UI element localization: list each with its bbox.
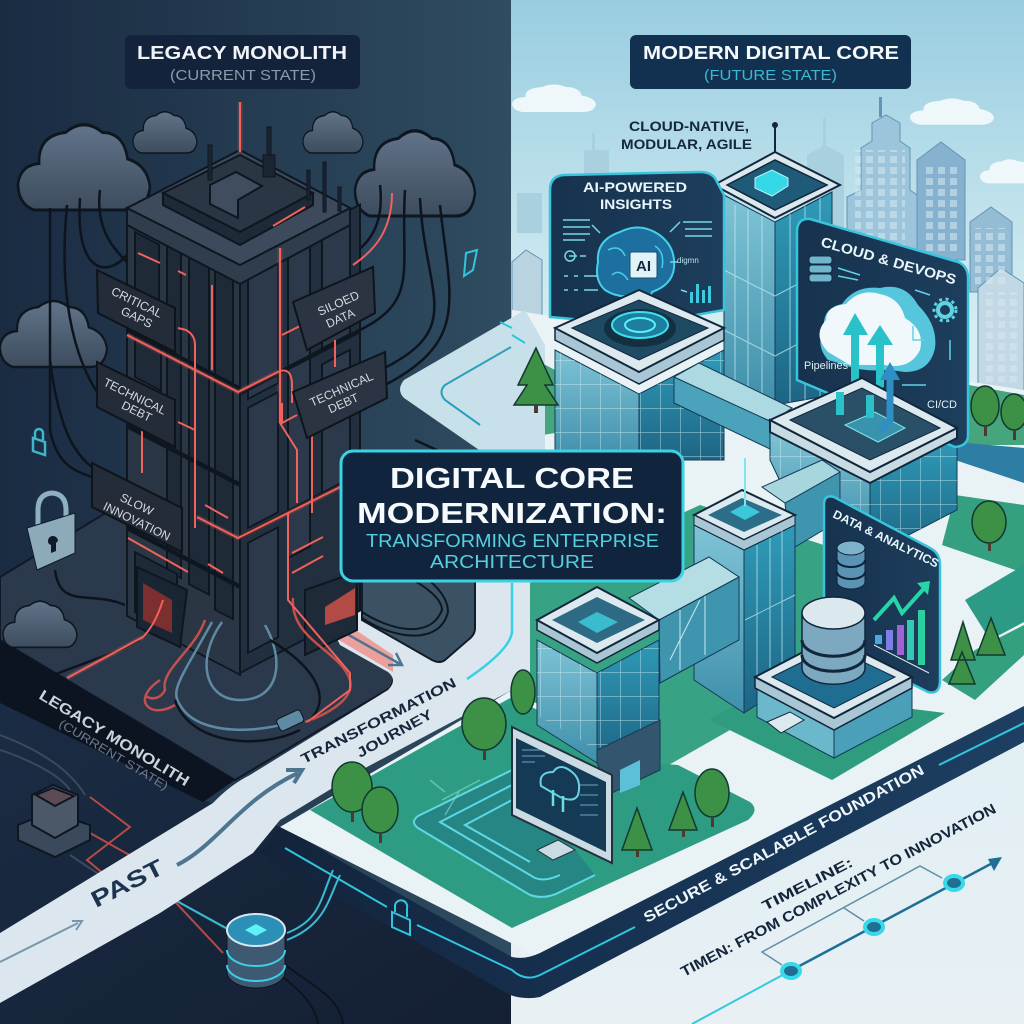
icon: server node bbox=[18, 785, 90, 857]
icon: cloud bbox=[819, 287, 935, 372]
callout: technical debt right: TECHNICAL bbox=[307, 369, 376, 410]
timeline text: TIMELINE: bbox=[759, 854, 855, 914]
icon: small teal shape bbox=[464, 250, 477, 276]
background: modern side bbox=[511, 0, 1024, 1024]
dark clouds bbox=[0, 112, 475, 647]
red circuit lines bbox=[67, 102, 392, 722]
panel: ai-powered insights: INSIGHTS bbox=[600, 196, 672, 212]
icon: database cylinder bbox=[802, 597, 865, 684]
road pad with cables bbox=[362, 581, 475, 662]
cloud devops building bbox=[770, 432, 957, 555]
secure foundation label: SECURE & SCALABLE FOUNDATION bbox=[641, 762, 927, 927]
subheading: cloud native bbox=[621, 118, 752, 152]
ai building bbox=[555, 328, 724, 460]
callout: siloed data: DATA bbox=[324, 306, 357, 331]
white clouds and distant skyline bbox=[512, 84, 1024, 393]
central title panel: TRANSFORMING ENTERPRISE bbox=[366, 531, 659, 551]
title: legacy heading: (CURRENT STATE) bbox=[170, 67, 316, 84]
front office building bbox=[537, 587, 660, 793]
central title panel: DIGITAL CORE bbox=[390, 463, 634, 495]
road label: transformation journey bbox=[298, 674, 459, 767]
central title panel: ARCHITECTURE bbox=[430, 552, 594, 572]
icon: ai brain bbox=[597, 227, 674, 305]
road label: transformation journey: JOURNEY bbox=[354, 706, 436, 761]
callout: technical debt left: TECHNICAL bbox=[101, 375, 169, 418]
platform rim bbox=[260, 706, 1024, 998]
title: modern heading bbox=[630, 35, 911, 89]
trees bbox=[332, 348, 1024, 850]
transformation road bbox=[0, 310, 545, 1003]
doors bbox=[137, 567, 357, 655]
arrows landing on roof bbox=[840, 385, 890, 432]
title: legacy heading bbox=[125, 35, 360, 89]
arrows up into cloud bbox=[840, 313, 900, 432]
callout: siloed data: SILOED bbox=[315, 288, 362, 319]
chart: rising bars and arrow bbox=[874, 581, 930, 673]
bottom legacy elements bbox=[18, 785, 410, 988]
icon: small teal lock bbox=[33, 429, 45, 455]
ai algorithm label: digmn bbox=[677, 256, 699, 265]
ci/cd label: CI/CD bbox=[927, 399, 957, 411]
ai building roof bbox=[555, 290, 724, 372]
title: legacy heading: LEGACY MONOLITH bbox=[137, 43, 347, 63]
title: modern heading: MODERN DIGITAL CORE bbox=[643, 43, 899, 63]
arrow: from door bbox=[340, 630, 402, 665]
tall back tower bbox=[714, 122, 840, 405]
callouts on tower bbox=[92, 267, 387, 552]
title: modern heading: (FUTURE STATE) bbox=[704, 67, 837, 84]
callout: technical debt right: DEBT bbox=[326, 390, 361, 416]
middle connector tower bbox=[694, 458, 795, 713]
ai mini chart bbox=[690, 284, 711, 303]
tower roof bbox=[127, 208, 350, 284]
callout: slow innovation: INNOVATION bbox=[101, 499, 173, 544]
background: legacy side bbox=[0, 0, 511, 1024]
ground under legacy platform bbox=[0, 700, 511, 1024]
callout: technical debt right bbox=[293, 352, 387, 438]
icon: rim lock bbox=[392, 900, 410, 935]
panel: ai-powered insights: AI-POWERED bbox=[583, 179, 687, 195]
roof units bbox=[163, 155, 313, 245]
antennas bbox=[208, 127, 341, 212]
legacy floor label: LEGACY MONOLITH bbox=[36, 687, 192, 790]
icon: database node bbox=[227, 914, 285, 988]
callout: critical gaps: CRITICAL bbox=[109, 284, 165, 321]
skybridge lower left bbox=[629, 557, 739, 683]
subheading: cloud native: CLOUD-NATIVE, bbox=[629, 118, 749, 134]
ai side icons bbox=[563, 220, 712, 292]
callout: slow innovation bbox=[92, 463, 182, 552]
left platform bbox=[0, 480, 394, 802]
platform cables bbox=[40, 598, 351, 741]
subheading: cloud native: MODULAR, AGILE bbox=[621, 136, 752, 152]
callout: technical debt left: DEBT bbox=[119, 398, 155, 425]
callout: critical gaps bbox=[97, 270, 175, 352]
panel: cloud and devops bbox=[797, 219, 968, 447]
callout: siloed data bbox=[293, 267, 375, 350]
skybridge lower right bbox=[762, 460, 840, 550]
legacy floor label: (CURRENT STATE) bbox=[56, 717, 171, 793]
cable connector bbox=[276, 709, 305, 732]
panel: cloud and devops: CLOUD & DEVOPS bbox=[819, 234, 958, 287]
callout: critical gaps: GAPS bbox=[119, 304, 155, 331]
icon: ai brain: AI bbox=[636, 258, 651, 275]
data building bbox=[755, 597, 912, 758]
small data traces bbox=[430, 780, 480, 815]
arrow: road journey bbox=[177, 770, 302, 865]
tree trunks bbox=[351, 405, 1016, 857]
arrow: road start bbox=[0, 921, 82, 962]
callout: slow innovation: SLOW bbox=[118, 490, 156, 519]
cables from clouds bbox=[50, 185, 480, 605]
road cyan line bbox=[467, 583, 512, 679]
panel: data and analytics: DATA & ANALYTICS bbox=[831, 507, 941, 571]
ground cables bbox=[0, 735, 343, 1024]
right platform land bbox=[280, 310, 1024, 955]
tower right face bbox=[240, 205, 360, 673]
icon: mini database bbox=[809, 256, 832, 282]
red glow bbox=[67, 102, 340, 678]
icon: monitor bbox=[512, 727, 612, 863]
road label: transformation journey: TRANSFORMATION bbox=[298, 674, 459, 767]
timeline bbox=[678, 801, 1002, 1024]
icon: padlock bbox=[27, 493, 75, 570]
timeline text: TIMEN: FROM COMPLEXITY TO INNOVATION bbox=[678, 801, 999, 981]
icon: database bbox=[837, 541, 865, 589]
cloud building roof bbox=[770, 378, 957, 483]
icon: gear bbox=[934, 299, 956, 321]
legacy tower bbox=[127, 127, 360, 675]
skybridge upper bbox=[674, 363, 792, 450]
central title panel bbox=[341, 451, 683, 581]
panel: data and analytics bbox=[824, 496, 941, 692]
tower left face bbox=[127, 208, 240, 675]
road label: past: PAST bbox=[86, 854, 168, 912]
database cyan links bbox=[287, 870, 340, 940]
central title panel: MODERNIZATION: bbox=[357, 498, 667, 530]
pipelines label: Pipelines bbox=[804, 360, 848, 372]
panel: ai-powered insights bbox=[550, 172, 724, 325]
callout: technical debt left bbox=[97, 362, 175, 447]
circuit on lawn bbox=[414, 770, 595, 897]
